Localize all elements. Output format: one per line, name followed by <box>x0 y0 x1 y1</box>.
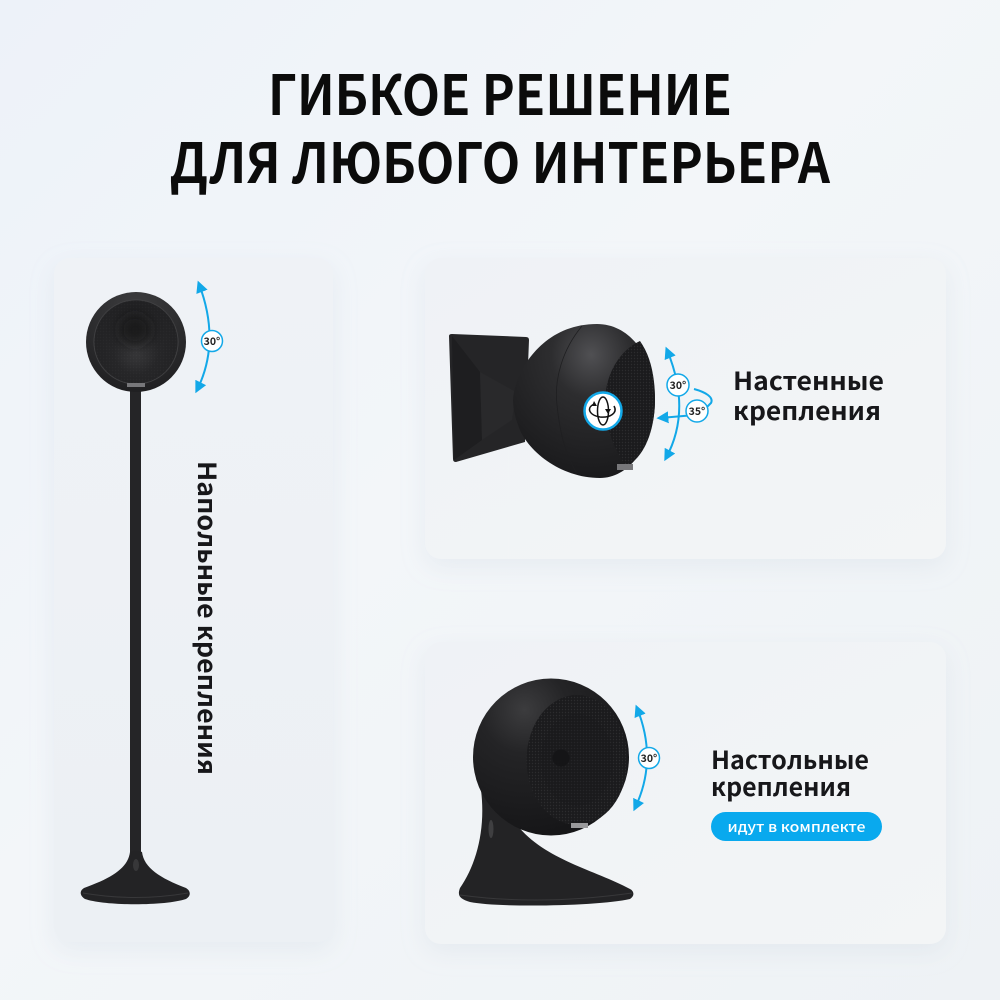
badge: included: идут в комплекте <box>728 817 866 837</box>
panel: table mount <box>425 642 946 944</box>
arrow: 30 degree tilt: 30° <box>204 334 220 349</box>
arrow: 30 degree: 30° <box>641 751 657 766</box>
panel: wall mount <box>425 258 946 559</box>
speaker head <box>86 292 186 392</box>
label: wall mounts: Настенные <box>733 362 884 398</box>
icon: floor speaker on stand <box>81 292 190 904</box>
label: floor mounts: Напольные крепления <box>190 461 226 775</box>
icon: desktop speaker <box>459 678 633 906</box>
arrow: 30 degree tilt <box>197 284 222 390</box>
label: table mounts: крепления <box>711 768 851 804</box>
label: table mounts: Настольные <box>711 741 869 777</box>
title: ДЛЯ ЛЮБОГО ИНТЕРЬЕРА <box>170 119 831 199</box>
badge: included <box>711 812 882 841</box>
arrows: 30 and 35 degree <box>660 350 712 458</box>
stand pole <box>130 390 141 854</box>
label: wall mounts <box>733 362 884 428</box>
arrows: 30 and 35 degree: 35° <box>689 404 705 419</box>
title <box>170 51 831 199</box>
title: ГИБКОЕ РЕШЕНИЕ <box>268 51 732 131</box>
icon: rotation <box>584 392 622 430</box>
label: table mounts <box>711 741 869 804</box>
icon: wall speaker <box>449 324 655 478</box>
panel: floor mount <box>54 258 333 942</box>
label: wall mounts: крепления <box>733 392 881 428</box>
arrow: 30 degree <box>635 708 660 808</box>
arrows: 30 and 35 degree: 30° <box>670 378 686 393</box>
stand base <box>81 850 190 904</box>
